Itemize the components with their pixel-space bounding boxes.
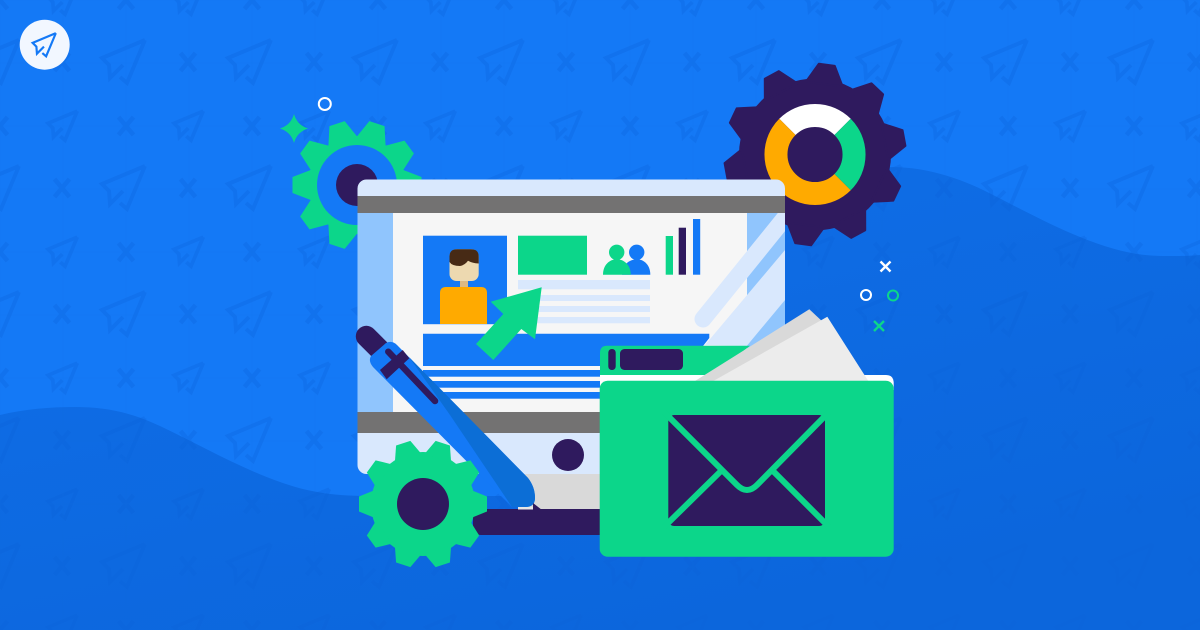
monitor stand base: [520, 470, 610, 512]
person neck: [460, 280, 468, 288]
monitor power button: [552, 439, 584, 471]
back paper: [695, 309, 824, 381]
pen nib: [518, 503, 542, 510]
tab pill small: [608, 349, 616, 370]
icon: green cross: [874, 321, 884, 331]
bar chart: [666, 219, 700, 275]
left side panel: [358, 213, 394, 412]
pen shaded side: [409, 357, 535, 507]
icon: white cross: [880, 262, 890, 272]
monitor: [358, 180, 792, 474]
arrow: [476, 287, 542, 360]
email folder: [600, 309, 894, 557]
pen cap: [366, 336, 385, 355]
blue text lines: [423, 370, 608, 399]
person head: [450, 249, 479, 281]
profile photo card: [423, 236, 507, 324]
pen clip: [388, 352, 435, 401]
icon: white ring right: [861, 290, 871, 300]
monitor foot bar: [473, 509, 613, 535]
monitor body: [358, 180, 785, 474]
icon: white ring left: [319, 98, 331, 110]
icon: green ring: [888, 290, 898, 300]
background wave: [0, 167, 1200, 630]
tab pill large: [620, 349, 683, 370]
gear: bottom green: [359, 439, 487, 569]
gear: left green: [292, 119, 422, 251]
screen content area: [393, 213, 747, 412]
monitor bottom grey bar: [358, 412, 785, 433]
pen crossbar: [380, 350, 409, 379]
pen body: [370, 342, 535, 507]
gear: large dark with donut chart: [723, 62, 907, 247]
person body: [440, 287, 487, 324]
screen diagonal reflection: [703, 209, 792, 346]
icon: sparkle star: [280, 114, 308, 143]
blue banner: [423, 334, 709, 366]
folder back tab: [600, 346, 750, 385]
text placeholder stripes: [518, 280, 650, 323]
pen: [366, 336, 542, 510]
logo badge: [20, 20, 70, 70]
icon: users: [603, 245, 650, 275]
folder front: [600, 381, 894, 557]
right side panel: [747, 213, 785, 412]
person hair: [450, 249, 479, 266]
front paper: [713, 317, 868, 381]
icon: envelope: [664, 412, 829, 527]
folder white strip: [600, 375, 894, 390]
green image block: [518, 236, 587, 275]
monitor top grey bar: [358, 196, 785, 213]
